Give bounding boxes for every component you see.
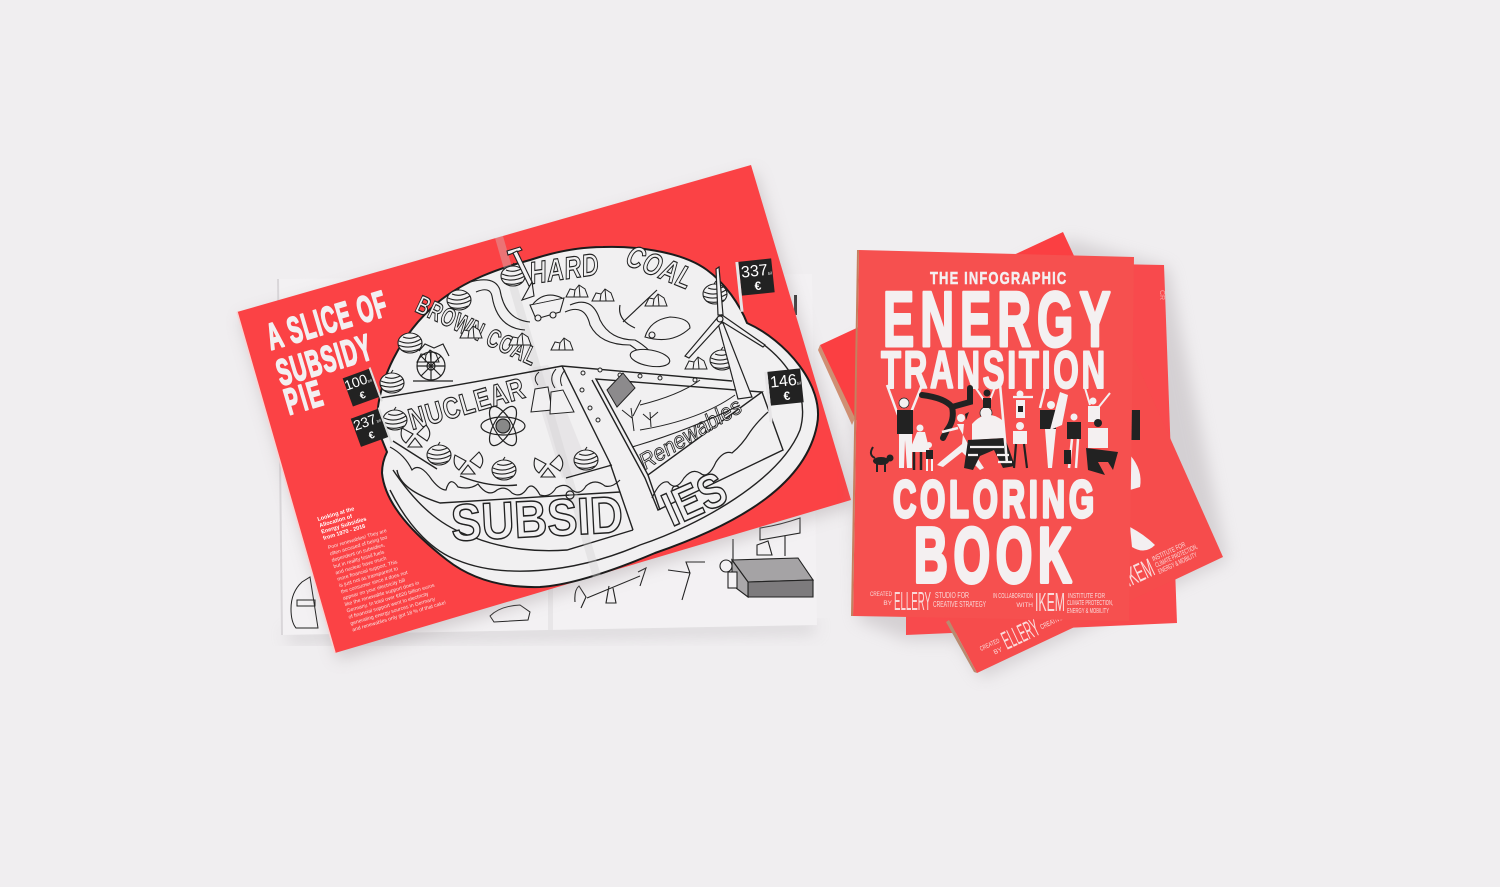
rotated copy: credit line: ELLERY	[997, 612, 1044, 655]
credit: ikem: WITH	[1016, 602, 1033, 609]
person: tree pose with dog	[1040, 388, 1068, 468]
slice dividing lines	[380, 366, 783, 530]
credit: ellery: STUDIO FOR	[935, 591, 969, 600]
text block: allocation of energy subsidies: but in reality fossil fuels	[333, 549, 386, 570]
rear book: rotated copy	[949, 350, 1223, 673]
label: ies: IES	[655, 463, 735, 537]
text block: allocation of energy subsidies: the consumer since it does not	[340, 570, 409, 595]
flag: 146 bn euro renewables: €	[783, 389, 791, 403]
rotated copy: credit line: CREATIVE	[1039, 615, 1064, 631]
label: hard coal	[527, 238, 698, 296]
icons: radiation signs	[401, 425, 563, 477]
label: renewables: Renewables	[634, 393, 747, 474]
credit: ellery: CREATED	[870, 591, 892, 598]
text block: allocation of energy subsidies: Germany. In total over €620 billion euros	[346, 583, 436, 614]
credit: ellery: ELLERY	[894, 586, 931, 616]
icon: atom	[481, 402, 525, 450]
person: kneeling man with girl	[1085, 388, 1118, 475]
person: big man with stripes	[964, 407, 1015, 470]
label: brown coal: BROWN COAL	[412, 290, 542, 371]
text block: allocation of energy subsidies: is just not as transparent to	[339, 566, 399, 589]
credit: ellery: BY	[883, 600, 893, 607]
heading: a slice of subsidy pie: PIE	[280, 373, 329, 423]
heading: the infographic: THE INFOGRAPHIC	[930, 269, 1067, 289]
person: left man	[887, 385, 922, 468]
text block: allocation of energy subsidies: of financial support went to electricity	[348, 591, 430, 621]
icon: mine shaft	[629, 347, 671, 369]
credit: ikem: INSTITUTE FOR	[1068, 593, 1105, 600]
icing drips	[390, 412, 768, 499]
rotated copy: credit line	[975, 601, 1068, 666]
label: subsid: SUBSID	[450, 486, 624, 553]
back page: right margin marks	[794, 295, 797, 315]
illustration: crowd of people lifting the title	[871, 373, 1118, 475]
text block: allocation of energy subsidies	[317, 489, 447, 634]
text block: allocation of energy subsidies: appear on your electricity bill	[342, 578, 406, 602]
heading: book: BOOK	[914, 512, 1078, 599]
rear book: left corner	[820, 232, 1075, 420]
credit: ellery: CREATIVE STRATEGY	[933, 600, 986, 609]
heading: energy: ENERGY	[883, 276, 1117, 363]
panel: stack of rear books: CR	[1158, 290, 1165, 300]
dotted cake filling	[580, 368, 697, 422]
flag: 100 bn euro brown coal	[342, 367, 383, 411]
rotated copy: credit line: BY	[993, 646, 1004, 656]
person: child on shoulders	[975, 387, 995, 408]
icons: plants	[622, 380, 740, 447]
person: woman with child	[909, 424, 933, 471]
text block: allocation of energy subsidies: often accused of being too	[329, 535, 388, 557]
icons: coal rocks	[417, 285, 707, 369]
panel: stack of rear books	[818, 232, 1223, 673]
credit: ikem	[993, 587, 1113, 617]
heading: coloring: COLORING	[893, 471, 1098, 529]
heading: a slice of subsidy pie: SUBSIDY	[272, 327, 378, 394]
credit: ikem: ENERGY & MOBILITY	[1067, 608, 1109, 615]
back page: market stall	[720, 518, 813, 597]
rotated copy: institute credit: INSTITUTE FOR	[1151, 542, 1187, 563]
plate rings and cake side	[390, 335, 803, 571]
icon: mine rails	[470, 280, 660, 365]
rotated copy: credit line: CREATED	[979, 638, 1001, 653]
icon: shovel	[507, 247, 534, 300]
flag: 100 bn euro brown coal: 100bil	[342, 369, 373, 394]
heading: a slice of subsidy pie: A SLICE OF	[262, 284, 393, 358]
fold shading	[495, 236, 601, 578]
flag: 337 bn euro hard coal	[735, 258, 776, 312]
back page: car illustration	[291, 577, 530, 628]
text block: allocation of energy subsidies: dependent on subsidies,	[331, 542, 386, 564]
text block: allocation of energy subsidies: and nuclear have much	[335, 556, 387, 576]
text block: allocation of energy subsidies: more financial support. This	[337, 559, 399, 583]
flag: 146 bn euro renewables: 146bil	[769, 371, 802, 392]
shadow of the spread	[240, 172, 856, 660]
rotated copy: institute credit: ENERGY & MOBILITY	[1157, 552, 1198, 576]
rear book: flat copy	[906, 262, 1177, 635]
flag: 237 bn euro nuclear	[350, 407, 392, 453]
open booklet underneath the spread	[277, 274, 817, 642]
flag: 237 bn euro nuclear: 237bil	[351, 409, 382, 434]
person: stacked girls	[1013, 390, 1033, 468]
rotated copy: institute credit: CLIMATE PROTECTION,	[1154, 544, 1199, 569]
icons: cream swirls	[380, 263, 734, 480]
text block: allocation of energy subsidies: Looking at the	[317, 506, 355, 523]
text block: allocation of energy subsidies: Energy Subsidies	[321, 516, 367, 536]
back page: seesaw and dancer	[575, 562, 705, 608]
text block: allocation of energy subsidies: Allocation of	[319, 514, 353, 529]
icon: cooling towers	[531, 369, 574, 414]
panel: red poster spread	[237, 165, 851, 653]
icon: black cat	[871, 447, 894, 472]
heading: a slice of subsidy pie	[262, 284, 393, 423]
flag: 337 bn euro hard coal: €	[754, 279, 762, 293]
flag: 337 bn euro hard coal: 337bil	[740, 261, 773, 282]
shadow of the book stack	[850, 240, 1227, 678]
credit: ikem: IN COLLABORATION	[993, 593, 1033, 600]
label: hard coal: COAL	[621, 238, 698, 296]
label: nuclear: NUCLEAR	[405, 371, 529, 436]
person: man in black	[1064, 414, 1081, 468]
credit: ikem: CLIMATE PROTECTION,	[1067, 600, 1113, 607]
person: yoga woman	[937, 412, 984, 470]
rotated copy: artwork fragments	[1130, 410, 1155, 551]
flag: 237 bn euro nuclear: €	[367, 430, 377, 442]
heading: transition: TRANSITION	[881, 341, 1108, 400]
cake silhouette and plate	[377, 247, 818, 587]
icon: water wheel	[413, 344, 453, 381]
rotated copy: institute credit: IKEM	[1119, 553, 1159, 592]
text block: allocation of energy subsidies: Poor renewables! They are	[327, 528, 388, 551]
credit: ikem: IKEM	[1035, 587, 1065, 617]
text block: allocation of energy subsidies: generating energy sources in Germany	[350, 596, 436, 627]
flag: 100 bn euro brown coal: €	[358, 390, 368, 402]
label: hard coal: HARD	[527, 246, 601, 291]
icon: pickaxe	[620, 290, 657, 328]
text block: allocation of energy subsidies: like the renewable support does in	[344, 580, 420, 608]
icon: miner helmet	[645, 317, 690, 340]
flag: 146 bn euro renewables	[764, 368, 805, 422]
person: acrobat	[922, 388, 970, 438]
panel: front cover of coloring book	[852, 250, 1134, 621]
icon: mine cart	[530, 295, 564, 321]
icon: wind turbine	[685, 267, 765, 399]
icon: solar panel	[607, 373, 635, 407]
chart: subsidy cake illustration	[377, 236, 818, 587]
text block: allocation of energy subsidies: from 1970 - 2016	[322, 524, 366, 542]
text block: allocation of energy subsidies: and renewables only got 18 % of that cake!	[352, 600, 447, 633]
icon: small turbine pole	[999, 373, 1007, 463]
